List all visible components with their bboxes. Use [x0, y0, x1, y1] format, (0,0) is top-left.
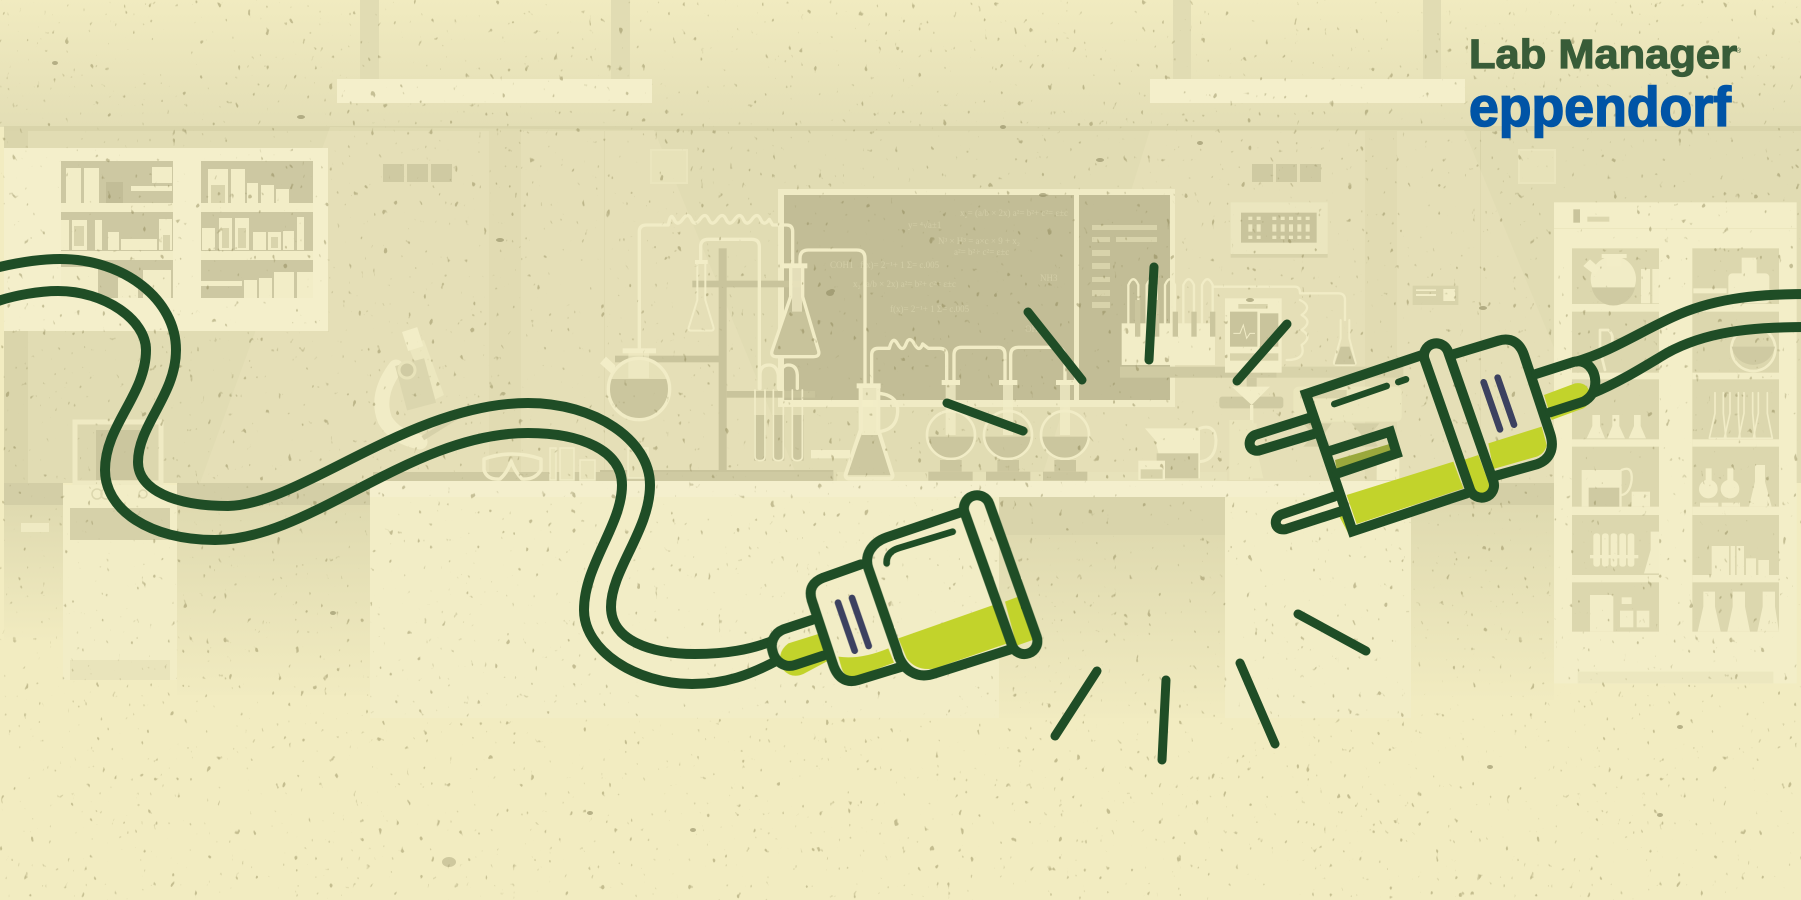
equations: COH1 — [830, 260, 854, 270]
equations: OH1 — [1025, 324, 1042, 334]
wall cabinet left — [4, 148, 328, 331]
glassware and monitor right of chalkboard — [1120, 279, 1403, 480]
equations: x₂= (a/b × 2x) a²= b²+ c²= ε±c — [960, 208, 1068, 218]
equations: a²= b²+ c²= ε±c — [954, 247, 1009, 257]
sparks upper — [947, 267, 1287, 431]
right cable — [1575, 294, 1801, 393]
wall switches — [383, 164, 1321, 182]
chalkboard with equations — [778, 189, 1175, 407]
equations: f(x)= 2⁻¹+ 1 Σ= c.005 — [890, 304, 970, 314]
left cable — [0, 259, 778, 684]
tall glass cabinet right — [1554, 202, 1797, 683]
sparks lower — [1055, 614, 1366, 760]
equations: x₂ (a/b × 2x) a²= b²+ c²= ε±c — [853, 279, 956, 289]
wall notices — [651, 150, 1555, 183]
right plug (pin end) — [1250, 340, 1595, 533]
small equipment and cabinet lower left — [63, 422, 177, 680]
equations: f(x)= 2⁻¹+ 1 Σ= c.005 — [860, 260, 940, 270]
equations: y= ⁴√a±1 — [908, 220, 941, 230]
left plug (socket end) — [772, 495, 1037, 681]
equations: NH3 — [1040, 273, 1058, 283]
logo: Lab Manager: ® — [1736, 47, 1742, 55]
equations — [830, 208, 1068, 334]
equations: N³ × H³ = a×c × 9 + x₂ — [938, 236, 1020, 246]
logo: eppendorf: eppendorf — [1469, 75, 1731, 138]
logo: Lab Manager: Lab Manager — [1469, 31, 1737, 77]
glassware apparatus left — [600, 215, 1089, 481]
electrical panel on wall — [1231, 202, 1458, 305]
goggles and bench items — [373, 448, 833, 481]
ceiling lamp left — [337, 0, 652, 103]
ceiling lamp right — [1150, 0, 1465, 103]
microscope — [382, 327, 458, 442]
